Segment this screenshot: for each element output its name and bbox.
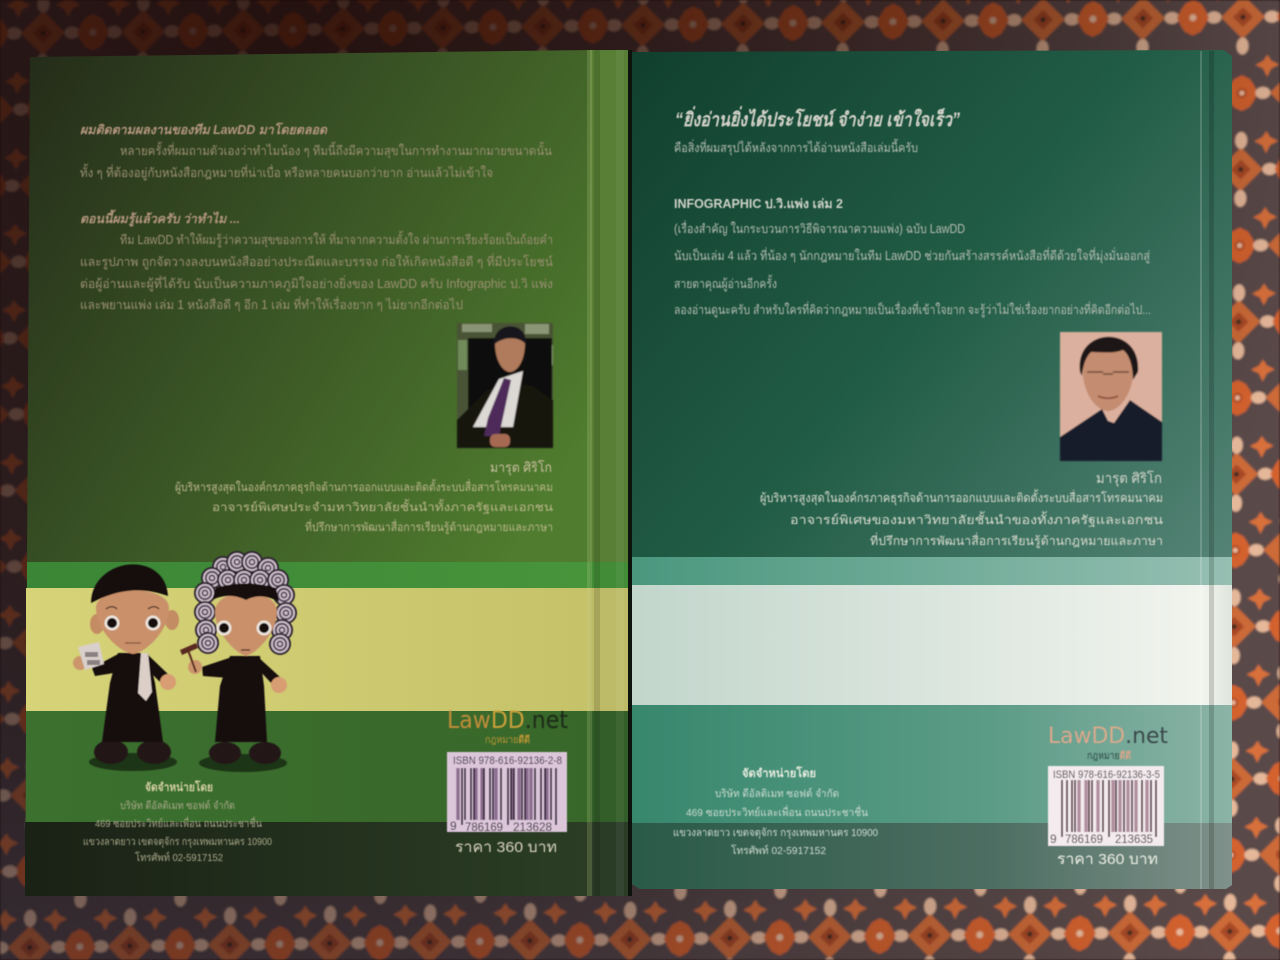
band: dark footer: [25, 822, 590, 896]
text block: left intro: ตอนนี้ผมรู้แล้วครับ ว่าทำไม ...: [80, 209, 240, 227]
illustration: judge character with wig and gavel: [180, 552, 296, 772]
band: upper green stripe: [27, 562, 590, 588]
text block: right intro: คือสิ่งที่ผมสรุปได้หลังจากการได้อ่านหนังสือเล่มนี้ครับ: [674, 138, 918, 156]
text block: left distributor: โทรศัพท์ 02-5917152: [135, 851, 223, 864]
text block: left intro: และพยานแพ่ง เล่ม 1 หนังสือดี ๆ อีก 1 เล่ม ที่ทำให้เรื่องยาก ๆ ไม่ยากอีกต่อไป: [80, 296, 463, 312]
text block: left intro: [80, 122, 553, 312]
barcode: ISBN right: 9: [1050, 832, 1057, 846]
text block: right intro: [674, 106, 1151, 318]
logo: LawDD.net right: LawDD.net: [1048, 724, 1168, 749]
text block: right distributor: แขวงลาดยาว เขตจตุจักร กรุงเทพมหานคร 10900: [673, 827, 878, 839]
text block: left intro: ผมติดตามผลงานของทีม LawDD มาโดยตลอด: [80, 122, 328, 137]
barcode: ISBN right: 213635: [1115, 834, 1153, 846]
panel: right book back cover: [632, 50, 1232, 889]
band: pale stripe: [632, 585, 1232, 705]
photo: author right: [1060, 332, 1162, 461]
text block: right bio: [760, 489, 1163, 549]
text block: left intro: ทีม LawDD ทำให้ผมรู้ว่าความสุขของการให้ ที่มาจากความตั้งใจ ผ่านการเรียงร้อยเป็นถ้อยคำ: [120, 230, 553, 248]
name: right author: มารุต ศิริโก: [1096, 470, 1162, 487]
barcode: ISBN left: 9: [450, 819, 457, 833]
band: lower green block: [26, 711, 590, 822]
text block: right distributor: จัดจำหน่ายโดย: [742, 765, 816, 780]
text block: left bio: อาจารย์พิเศษประจำมหาวิทยาลัยชั้นนำทั้งภาครัฐและเอกชน: [212, 499, 553, 514]
text block: right intro: INFOGRAPHIC ป.วิ.แพ่ง เล่ม 2: [674, 197, 843, 211]
band: yellow stripe: [26, 588, 590, 711]
text block: left distributor: บริษัท ดีอัลติเมท ซอฟต์ จำกัด: [120, 799, 235, 812]
logo: LawDD.net right: กฎหมายดีดี: [1087, 750, 1131, 762]
text block: right intro: สายตาคุณผู้อ่านอีกครั้ง: [674, 274, 777, 292]
text block: right intro: “ยิ่งอ่านยิ่งได้ประโยชน์ จำง่าย เข้าใจเร็ว”: [675, 106, 960, 131]
photo: author left: [457, 323, 553, 448]
price: left: ราคา 360 บาท: [455, 839, 557, 856]
band: mid teal block: [632, 705, 1232, 823]
text block: left distributor: [83, 779, 272, 864]
barcode: ISBN left: 213628: [513, 822, 552, 834]
text block: right intro: นับเป็นเล่ม 4 แล้ว ที่น้อง ๆ นักกฎหมายในทีม LawDD ช่วยกันสร้างสรรค์หนังสือที่ดีด้วยใจที่มุ่งมั่นออกสู่: [674, 247, 1150, 264]
logo: LawDD.net left: กฎหมายดีดี: [485, 734, 530, 746]
illustration: lawyer character: [73, 564, 179, 771]
text block: left bio: ผู้บริหารสูงสุดในองค์กรภาคธุรกิจด้านการออกแบบและติดตั้งระบบสื่อสารโทรคมนาคม: [175, 479, 553, 494]
text block: left distributor: จัดจำหน่ายโดย: [145, 779, 213, 794]
text block: left intro: และรูปภาพ ถูกจัดวางลงบนหนังสืออย่างประณีตและบรรจง ก่อให้เกิดหนังสือดี ๆ ที่มีประโยชน์: [80, 253, 553, 270]
text block: left distributor: แขวงลาดยาว เขตจตุจักร กรุงเทพมหานคร 10900: [83, 836, 272, 848]
text block: right bio: ผู้บริหารสูงสุดในองค์กรภาคธุรกิจด้านการออกแบบและติดตั้งระบบสื่อสารโทรคมนาคม: [760, 489, 1163, 506]
text block: right intro: ลองอ่านดูนะครับ สำหรับใครที่คิดว่ากฎหมายเป็นเรื่องที่เข้าใจยาก จะรู้ว่าไม่ใช่เรื่องยากอย่างที่คิดอีกต่อไป...: [674, 301, 1151, 318]
spine of left book: [587, 50, 628, 896]
text block: left bio: [175, 479, 553, 534]
gap between books: [628, 50, 632, 896]
barcode: ISBN left: [447, 752, 567, 834]
panel: left book back cover: [25, 50, 628, 896]
text block: left intro: ทั้ง ๆ ที่ต้องอยู่กับหนังสือกฎหมายที่น่าเบื่อ หรือหลายคนบอกว่ายาก อ่านแล้วไม่เข้าใจ: [80, 163, 493, 181]
text block: left intro: หลายครั้งที่ผมถามตัวเองว่าทำไมน้อง ๆ ทีมนี้ถึงมีความสุขในการทำงานมากมายขนาดนั้น: [120, 141, 552, 159]
barcode: ISBN right: [1048, 766, 1164, 846]
name: left author: มารุต ศิริโก: [490, 459, 552, 476]
barcode: ISBN right: 786169: [1065, 834, 1103, 846]
text block: right distributor: 469 ซอยประวิทย์และเพื่อน ถนนประชาชื่น: [686, 805, 868, 819]
logo: LawDD.net right: [1048, 724, 1168, 762]
band: dark footer: [632, 823, 1232, 889]
text block: right intro: (เรื่องสำคัญ ในกระบวนการวิธีพิจารณาความแพ่ง) ฉบับ LawDD: [674, 220, 965, 236]
text block: right bio: ที่ปรึกษาการพัฒนาสื่อการเรียนรู้ด้านกฎหมายและภาษา: [870, 532, 1163, 549]
barcode: ISBN left: 786169: [465, 822, 503, 834]
text block: right distributor: [673, 765, 878, 857]
spine groove of right book: [1200, 51, 1214, 889]
band: teal stripe: [632, 557, 1232, 585]
text block: left bio: ที่ปรึกษาการพัฒนาสื่อการเรียนรู้ด้านกฎหมายและภาษา: [305, 519, 553, 534]
barcode: ISBN left: ISBN 978-616-92136-2-8: [453, 755, 562, 767]
text block: right distributor: โทรศัพท์ 02-5917152: [731, 844, 826, 857]
barcode: ISBN right: ISBN 978-616-92136-3-5: [1053, 769, 1160, 781]
text block: right distributor: บริษัท ดีอัลติเมท ซอฟต์ จำกัด: [715, 787, 839, 800]
logo: LawDD.net left: [447, 706, 568, 746]
text block: left intro: ต่อผู้อ่านและผู้ที่ได้รับ นับเป็นความภาคภูมิใจอย่างยิ่งของ LawDD ครับ Infographic ป.วิ แพ่ง: [80, 275, 553, 292]
logo: LawDD.net left: LawDD.net: [447, 706, 568, 734]
text block: right bio: อาจารย์พิเศษของมหาวิทยาลัยชั้นนำของทั้งภาครัฐและเอกชน: [790, 511, 1163, 527]
price: right: ราคา 360 บาท: [1057, 851, 1158, 868]
text block: left distributor: 469 ซอยประวิทย์และเพื่อน ถนนประชาชื่น: [95, 816, 262, 830]
